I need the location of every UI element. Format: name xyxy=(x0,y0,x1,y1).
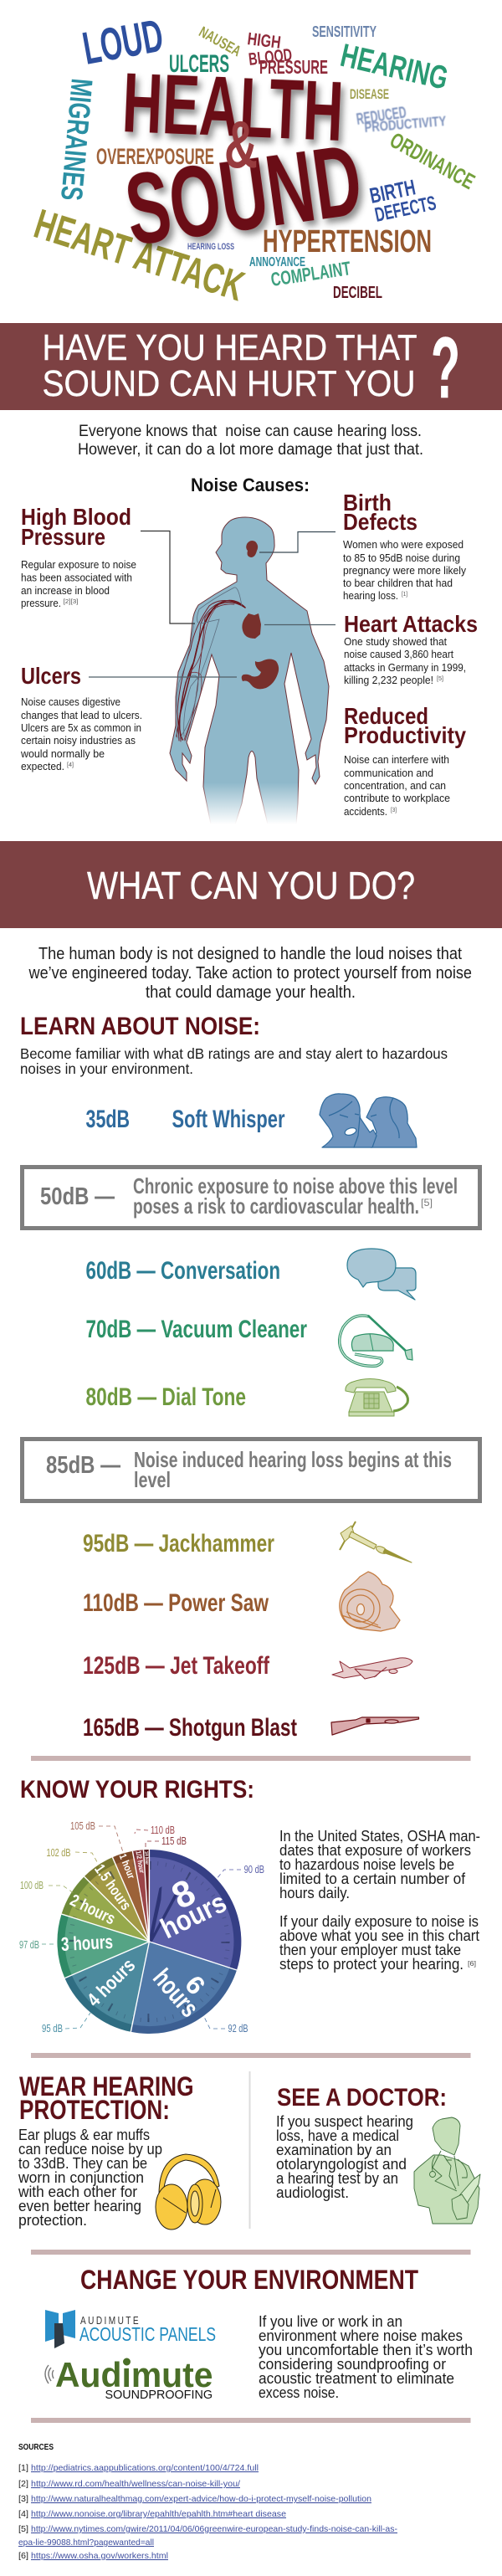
OSHA paragraph: dates that exposure of workers xyxy=(279,1842,471,1859)
action paragraph xyxy=(28,945,472,1002)
OSHA paragraph: above what you see in this chart xyxy=(279,1927,479,1944)
panel: wear hearing protection: to 33dB. They can be xyxy=(18,2155,147,2172)
slice labels: 6 xyxy=(179,1970,211,2000)
pie leader labels: 102 dB xyxy=(47,1847,70,1859)
callout: reduced productivity: Noise can interfere with xyxy=(344,753,449,766)
callout: ulcers: Ulcers xyxy=(21,663,81,689)
row: 35dB soft whisper: 35dB xyxy=(85,1106,130,1133)
sources list: http://pediatrics.aappublications.org/content/100/4/724.full xyxy=(31,2463,259,2473)
box: 50dB warning: 50dB — xyxy=(40,1183,115,1210)
action paragraph: that could damage your health. xyxy=(146,983,356,1002)
banner headline: SOUND CAN HURT YOU xyxy=(42,363,415,404)
panel: see a doctor: a hearing test by an xyxy=(276,2170,398,2187)
row: 95dB jackhammer xyxy=(83,1521,412,1563)
panel: wear hearing protection: WEAR HEARING xyxy=(19,2071,194,2101)
sources list xyxy=(18,2442,397,2561)
environment paragraph: environment where noise makes xyxy=(259,2327,463,2344)
pie leader labels: 92 dB xyxy=(228,2023,248,2035)
sources list: [5] xyxy=(18,2524,28,2534)
panel: wear hearing protection xyxy=(18,2071,221,2230)
row: 60dB conversation xyxy=(85,1249,416,1300)
word: NAUSEA: NAUSEA xyxy=(197,23,243,59)
callout: high blood pressure: has been associated with xyxy=(21,571,132,584)
icon: sound waves xyxy=(45,2365,54,2384)
row: 80dB dial tone xyxy=(85,1379,407,1416)
divider rule xyxy=(31,2250,470,2255)
OSHA paragraph xyxy=(279,1828,480,1973)
arm blood vessels xyxy=(176,588,245,741)
panel: see a doctor: If you suspect hearing xyxy=(276,2113,413,2130)
logo: audimute acoustic panels: ACOUSTIC PANELS xyxy=(79,2323,216,2345)
callout: ulcers: changes that lead to ulcers. xyxy=(21,709,142,721)
environment paragraph xyxy=(259,2313,473,2401)
icon: globe xyxy=(122,2358,131,2366)
word cloud title art xyxy=(29,9,479,310)
environment paragraph: you uncomfortable then it’s worth xyxy=(259,2342,473,2358)
panel: wear hearing protection: protection. xyxy=(18,2212,87,2229)
icon: jet xyxy=(332,1658,412,1679)
callout: heart attacks: Heart Attacks xyxy=(344,611,478,637)
sources list: epa-lie-99088.html?pagewanted=all xyxy=(18,2538,154,2548)
word: HEALTH: HEALTH xyxy=(120,56,346,159)
word: HEARING LOSS: HEARING LOSS xyxy=(187,242,234,252)
pie clock chart: exposure hours xyxy=(57,1850,241,2034)
pie leader labels xyxy=(19,1820,264,2035)
icon: ear muffs xyxy=(156,2154,221,2230)
environment paragraph: If you live or work in an xyxy=(259,2313,402,2330)
word: DEFECTS: DEFECTS xyxy=(373,192,438,227)
callout: ulcers: Ulcers are 5x as common in xyxy=(21,721,141,734)
OSHA paragraph: then your employer must take xyxy=(279,1942,461,1958)
sources list: [6] xyxy=(18,2551,28,2561)
box: 50dB warning: [5] xyxy=(421,1197,433,1208)
learn about noise text: Become familiar with what dB ratings are and stay alert to hazardous xyxy=(20,1045,448,1062)
pie leader labels: 110 dB xyxy=(151,1824,175,1836)
pie leader labels: 100 dB xyxy=(20,1880,44,1891)
heading: noise causes: Noise Causes: xyxy=(191,475,310,495)
intro paragraph xyxy=(78,423,423,459)
callout: ulcers: would normally be xyxy=(20,747,105,760)
icon: building xyxy=(45,2310,75,2348)
callout: reduced productivity: contribute to workplace xyxy=(344,792,450,804)
callout: high blood pressure: High Blood xyxy=(21,504,131,530)
slice separators xyxy=(61,1850,237,2032)
row: 35dB soft whisper: Soft Whisper xyxy=(172,1106,285,1133)
callout: birth defects: [1] xyxy=(402,592,407,598)
slice labels: 1 hour xyxy=(117,1852,137,1881)
banner: what can you do: WHAT CAN YOU DO? xyxy=(87,864,415,907)
callout: ulcers: certain noisy industries as xyxy=(21,734,136,747)
icon: power saw xyxy=(340,1572,400,1631)
heading: learn about noise: LEARN ABOUT NOISE: xyxy=(20,1013,260,1040)
callout: ulcers: Noise causes digestive xyxy=(21,695,120,708)
banner headline xyxy=(42,320,460,417)
callout: heart attacks xyxy=(344,611,478,686)
word: DECIBEL: DECIBEL xyxy=(333,284,382,302)
panel: wear hearing protection: can reduce noise by up xyxy=(18,2141,162,2158)
callout: high blood pressure: an increase in blood xyxy=(21,584,110,597)
row: 35dB soft whisper xyxy=(85,1094,417,1147)
callout: birth defects: to bear children that had xyxy=(343,577,453,589)
callout: reduced productivity: Reduced xyxy=(344,703,428,729)
icon: doctor xyxy=(414,2117,480,2224)
word: ULCERS: ULCERS xyxy=(169,50,229,78)
sources list: [1] xyxy=(18,2463,28,2473)
word: COMPLAINT: COMPLAINT xyxy=(269,257,352,290)
sources list: http://www.rd.com/health/wellness/can-noise-kill-you/ xyxy=(31,2479,240,2489)
logo: audimute acoustic panels xyxy=(45,2310,216,2348)
stomach xyxy=(242,659,279,689)
heading: change your environment: CHANGE YOUR ENVIRONMENT xyxy=(80,2265,418,2295)
sources list: SOURCES xyxy=(18,2442,54,2452)
panel: wear hearing protection: Ear plugs & ear muffs xyxy=(18,2127,150,2143)
OSHA paragraph: hours daily. xyxy=(279,1885,350,1901)
word: ANNOYANCE: ANNOYANCE xyxy=(249,255,305,269)
connector: heart attacks xyxy=(264,624,336,626)
sources list: [3] xyxy=(18,2494,28,2504)
callout: heart attacks: [5] xyxy=(437,676,443,682)
word: ampersand: & xyxy=(224,107,258,182)
word: HEARING: HEARING xyxy=(337,38,451,97)
pie rim xyxy=(57,1850,241,2034)
divider rule xyxy=(31,2418,470,2423)
panel: wear hearing protection: PROTECTION: xyxy=(19,2095,170,2125)
box: 85dB warning xyxy=(22,1439,480,1501)
body silhouette xyxy=(170,517,329,824)
environment paragraph: excess noise. xyxy=(259,2384,339,2401)
sources list: [2] xyxy=(18,2479,28,2489)
icon: whispering women xyxy=(320,1094,417,1147)
row: 80dB dial tone: 80dB — Dial Tone xyxy=(85,1383,246,1411)
slice labels: 2 hours xyxy=(67,1891,118,1928)
word: REDUCED: REDUCED xyxy=(356,104,407,129)
heading: know your rights: KNOW YOUR RIGHTS: xyxy=(20,1776,254,1804)
word: DISEASE: DISEASE xyxy=(350,86,389,102)
banner headline: HAVE YOU HEARD THAT xyxy=(42,327,417,368)
sources list: http://www.nonoise.org/library/epahlth/epahlth.htm#heart disease xyxy=(31,2509,286,2519)
row: 60dB conversation: 60dB — Conversation xyxy=(85,1257,280,1285)
callout: reduced productivity: concentration, and can xyxy=(344,779,446,792)
slice labels xyxy=(60,1850,232,2023)
callout: ulcers: [4] xyxy=(67,762,74,768)
panel: see a doctor: otolaryngologist and xyxy=(276,2156,407,2173)
row: 70dB vacuum cleaner: 70dB — Vacuum Cleaner xyxy=(85,1316,307,1343)
word: LOUD: LOUD xyxy=(79,9,167,74)
body diagram xyxy=(89,517,336,824)
slice labels: 1.5 hours xyxy=(91,1861,135,1913)
callout: heart attacks: One study showed that xyxy=(344,635,447,648)
sources list: http://www.nytimes.com/gwire/2011/04/06/06greenwire-european-study-finds-noise-can-kill-as- xyxy=(31,2524,397,2534)
callout: birth defects: Birth xyxy=(343,490,392,516)
OSHA paragraph: steps to protect your hearing. xyxy=(279,1956,464,1973)
word: BIRTH: BIRTH xyxy=(367,174,417,208)
banner headline: ? xyxy=(431,320,460,417)
word: HIGH: HIGH xyxy=(246,29,282,53)
intro paragraph: Everyone knows that noise can cause hearing loss. xyxy=(79,423,422,440)
sources list: https://www.osha.gov/workers.html xyxy=(31,2551,168,2561)
divider rule xyxy=(31,2053,470,2058)
icon: telephone xyxy=(346,1379,407,1416)
divider rule xyxy=(31,1756,470,1761)
icon: vacuum cleaner xyxy=(340,1316,412,1366)
row: 110dB power saw: 110dB — Power Saw xyxy=(83,1589,269,1617)
callout: birth defects: Defects xyxy=(343,509,417,535)
environment paragraph: considering soundproofing or xyxy=(259,2356,446,2373)
callout: heart attacks: killing 2,232 people! xyxy=(344,674,433,686)
callout: reduced productivity xyxy=(344,703,466,818)
callout: reduced productivity: accidents. xyxy=(344,805,387,818)
callout: ulcers xyxy=(20,663,142,772)
callout: birth defects: to 85 to 95dB noise during xyxy=(343,552,460,564)
word: SENSITIVITY: SENSITIVITY xyxy=(312,23,376,40)
callout: birth defects: pregnancy were more likely xyxy=(343,564,466,577)
callout: reduced productivity: communication and xyxy=(344,767,433,779)
slice labels: 8 xyxy=(166,1871,202,1917)
callout: ulcers: expected. xyxy=(21,760,64,772)
clock hands xyxy=(148,1886,177,1942)
connector: ulcers xyxy=(89,676,237,678)
word: OVEREXPOSURE: OVEREXPOSURE xyxy=(96,144,214,169)
action paragraph: The human body is not designed to handle the loud noises that xyxy=(38,945,462,963)
word: SOUND: SOUND xyxy=(119,122,368,267)
connector: birth defects xyxy=(259,532,336,552)
intro paragraph: However, it can do a lot more damage that just that. xyxy=(78,441,423,459)
slice labels: 4 hours xyxy=(83,1954,139,2011)
logo: audimute soundproofing: Audimute xyxy=(55,2355,213,2394)
panel: see a doctor xyxy=(276,2084,480,2224)
sources list: [4] xyxy=(18,2509,28,2519)
word: HEART ATTACK: HEART ATTACK xyxy=(29,200,250,310)
slice labels: 3 hours xyxy=(60,1931,114,1955)
word: MIGRAINES: MIGRAINES xyxy=(54,77,100,202)
box: 85dB warning: 85dB — xyxy=(46,1452,120,1479)
callout: high blood pressure: pressure. xyxy=(21,597,61,609)
row: 70dB vacuum cleaner xyxy=(85,1316,412,1366)
callout: birth defects xyxy=(343,490,466,602)
panel: wear hearing protection: worn in conjunction xyxy=(18,2169,144,2186)
callout: heart attacks: noise caused 3,860 heart xyxy=(344,648,453,660)
callout: birth defects: hearing loss. xyxy=(343,589,398,602)
logo: audimute acoustic panels: AUDIMUTE xyxy=(80,2315,141,2327)
callout: high blood pressure: [2][3] xyxy=(64,599,79,605)
OSHA paragraph: In the United States, OSHA man- xyxy=(279,1828,480,1845)
slice labels: hours xyxy=(156,1886,232,1945)
banner: have you heard xyxy=(0,320,502,417)
slice labels: 1/4 hour xyxy=(143,1851,149,1865)
callout: heart attacks: attacks in Germany in 1999, xyxy=(344,661,466,674)
heart xyxy=(242,613,261,639)
callout: high blood pressure xyxy=(21,504,136,609)
leader dashes xyxy=(42,1826,241,2029)
panel: see a doctor: examination by an xyxy=(276,2142,392,2158)
icon: jackhammer xyxy=(340,1521,412,1563)
pie leader labels: 95 dB xyxy=(42,2023,63,2035)
sources list: http://www.naturalhealthmag.com/expert-advice/how-do-i-protect-myself-noise-pollution xyxy=(31,2494,371,2504)
row: 95dB jackhammer: 95dB — Jackhammer xyxy=(83,1530,274,1557)
pie leader labels: 105 dB xyxy=(70,1820,95,1832)
OSHA paragraph: to hazardous noise levels be xyxy=(279,1856,454,1873)
ear xyxy=(246,541,258,557)
icon: speech bubbles xyxy=(347,1249,416,1300)
panel: wear hearing protection: even better hearing xyxy=(18,2198,141,2214)
callout: high blood pressure: Regular exposure to noise xyxy=(21,558,136,571)
panel: wear hearing protection: with each other for xyxy=(18,2183,137,2200)
row: 125dB jet takeoff: 125dB — Jet Takeoff xyxy=(83,1652,270,1680)
banner: what can you do xyxy=(0,841,502,928)
panel: see a doctor: loss, have a medical xyxy=(276,2127,399,2144)
slice labels: hours xyxy=(147,1963,205,2023)
pie faces xyxy=(64,1857,233,2026)
learn about noise text: noises in your environment. xyxy=(20,1060,193,1077)
callout: reduced productivity: Productivity xyxy=(344,722,466,748)
row: 110dB power saw xyxy=(83,1572,400,1631)
OSHA paragraph: [6] xyxy=(468,1960,476,1968)
pie leader labels: 97 dB xyxy=(19,1939,39,1951)
word: PRESSURE: PRESSURE xyxy=(259,56,328,78)
pie leader labels: 90 dB xyxy=(244,1864,264,1876)
row: 165dB shotgun blast: 165dB — Shotgun Blast xyxy=(83,1714,297,1742)
panel: see a doctor: SEE A DOCTOR: xyxy=(277,2084,447,2112)
connector: high blood pressure xyxy=(141,531,195,623)
OSHA paragraph: If your daily exposure to noise is xyxy=(279,1913,479,1930)
icon: shotgun xyxy=(331,1717,418,1735)
vertical divider xyxy=(249,2071,251,2229)
word: PRODUCTIVITY: PRODUCTIVITY xyxy=(364,113,448,136)
slice labels: 1/2 hour xyxy=(134,1850,146,1874)
OSHA paragraph: limited to a certain number of xyxy=(279,1870,466,1887)
word: BLOOD: BLOOD xyxy=(248,45,293,69)
box: 85dB warning: level xyxy=(134,1467,171,1492)
box: 50dB warning xyxy=(22,1167,480,1229)
environment paragraph: acoustic treatment to eliminate xyxy=(259,2370,454,2387)
pie leader labels: 115 dB xyxy=(161,1835,187,1847)
panel: see a doctor: audiologist. xyxy=(276,2184,349,2201)
logo: audimute soundproofing: SOUNDPROOFING xyxy=(105,2388,213,2402)
callout: high blood pressure: Pressure xyxy=(21,524,105,550)
learn about noise text xyxy=(20,1045,448,1077)
callout: birth defects: Women who were exposed xyxy=(343,538,464,551)
callout: reduced productivity: [3] xyxy=(391,808,397,813)
